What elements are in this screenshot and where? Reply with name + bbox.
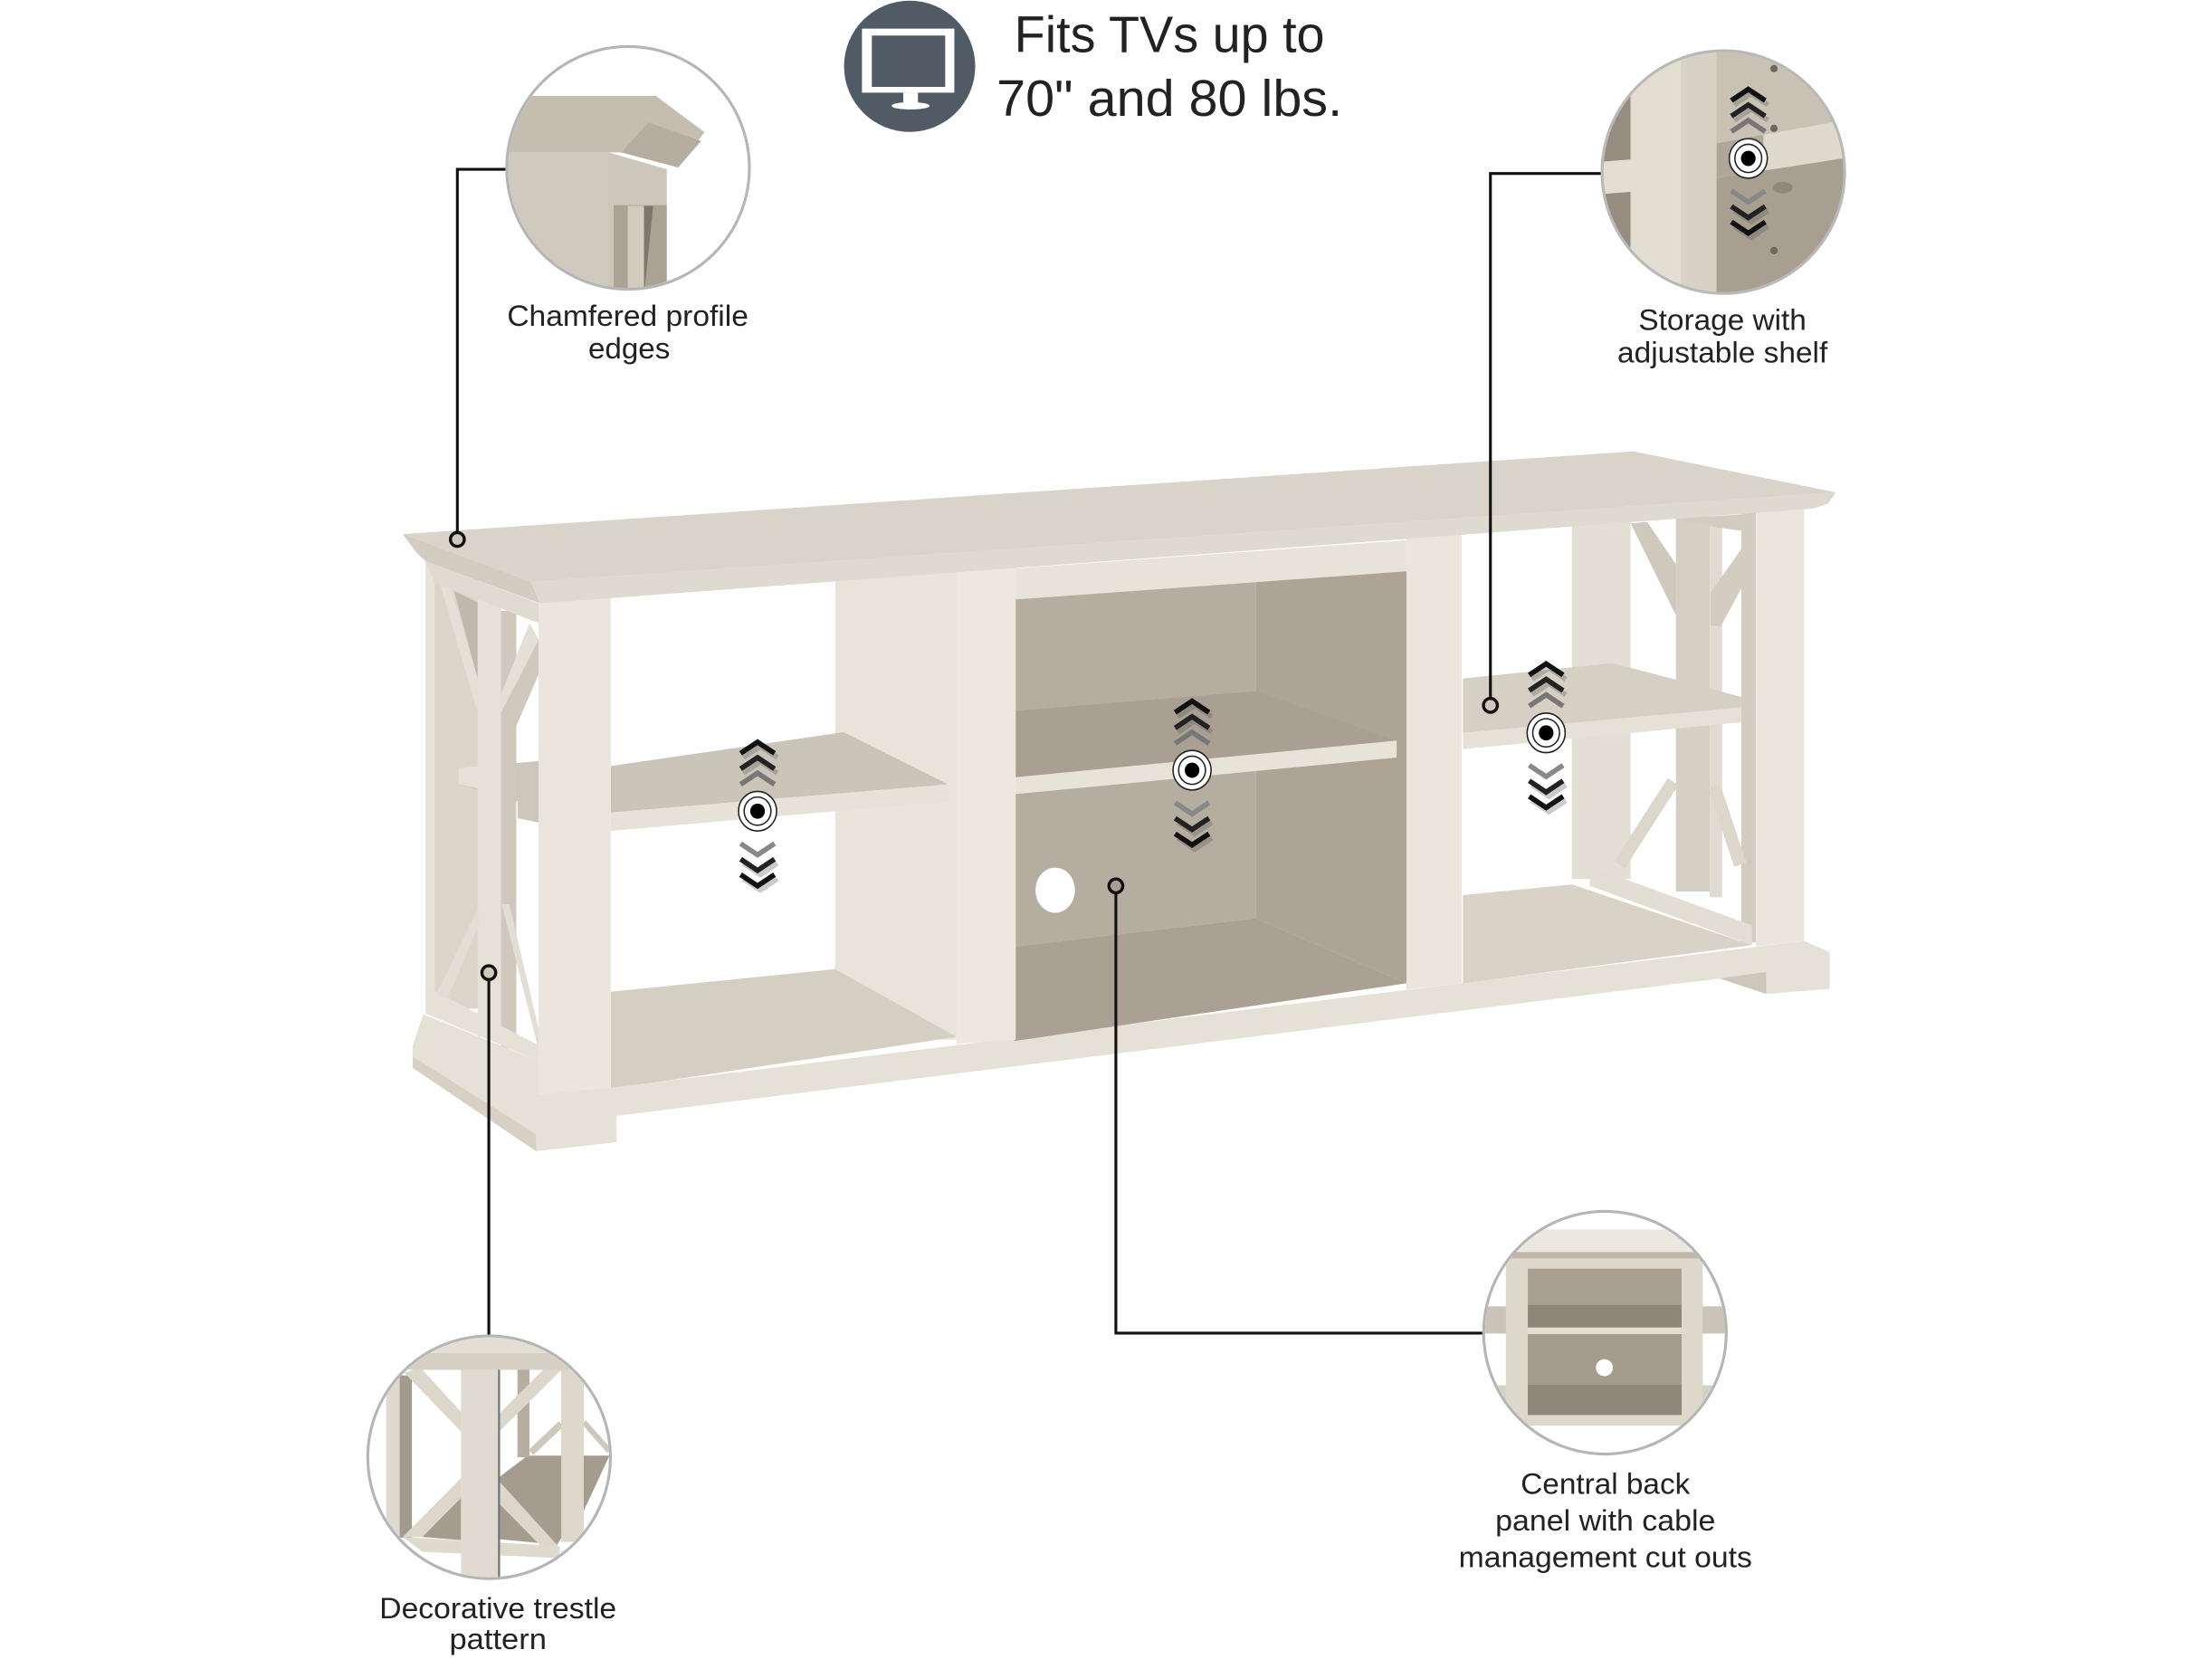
infographic: TV stand features	[366, 0, 1846, 1654]
heading: TV fit	[996, 6, 1342, 127]
panel: central back inset	[1482, 1211, 1730, 1454]
callout line: adjustable shelf	[1483, 174, 1603, 712]
icon: TV monitor badge	[844, 1, 976, 132]
icon: shelf adjust arrows right	[1527, 663, 1566, 812]
label: chamfered: edges	[588, 331, 670, 365]
heading: TV fit: 70" and 80 lbs.	[996, 70, 1342, 127]
TV stand product illustration	[403, 452, 1835, 1151]
label: central back panel: management cut outs	[1459, 1540, 1752, 1574]
base and feet	[413, 941, 1830, 1151]
label: central back panel: panel with cable	[1495, 1503, 1715, 1537]
front posts	[539, 505, 1805, 1095]
right bay	[1463, 884, 1752, 983]
cable cut-out hole	[1035, 868, 1075, 912]
panel: chamfered profile inset	[501, 46, 749, 303]
callout line: back panel	[1109, 879, 1484, 1333]
icon: shelf adjust arrows center	[1173, 701, 1212, 849]
label: central back panel: Central back	[1521, 1467, 1691, 1501]
label: trestle	[379, 1591, 616, 1655]
label: central back panel	[1459, 1467, 1752, 1574]
label: trestle: Decorative trestle	[379, 1591, 616, 1625]
callout line: trestle	[481, 966, 496, 1338]
label: adjustable shelf	[1617, 303, 1828, 369]
left trestle side	[425, 560, 540, 1061]
panel: adjustable shelf inset	[1600, 49, 1846, 295]
panel: trestle inset	[367, 1336, 614, 1581]
heading: TV fit: Fits TVs up to	[1015, 6, 1325, 63]
left bay	[611, 571, 962, 1089]
center bay	[1015, 540, 1406, 1041]
side header rail	[425, 561, 540, 623]
label: adjustable shelf: Storage with	[1638, 303, 1807, 337]
label: trestle: pattern	[449, 1622, 547, 1655]
table top and molding	[403, 452, 1835, 604]
icon: shelf adjust arrows left	[739, 742, 777, 891]
label: adjustable shelf: adjustable shelf	[1617, 336, 1828, 369]
right trestle side	[1463, 510, 1756, 945]
callout line: chamfered edges	[451, 169, 508, 547]
label: chamfered	[507, 299, 748, 365]
label: chamfered: Chamfered profile	[507, 299, 748, 332]
